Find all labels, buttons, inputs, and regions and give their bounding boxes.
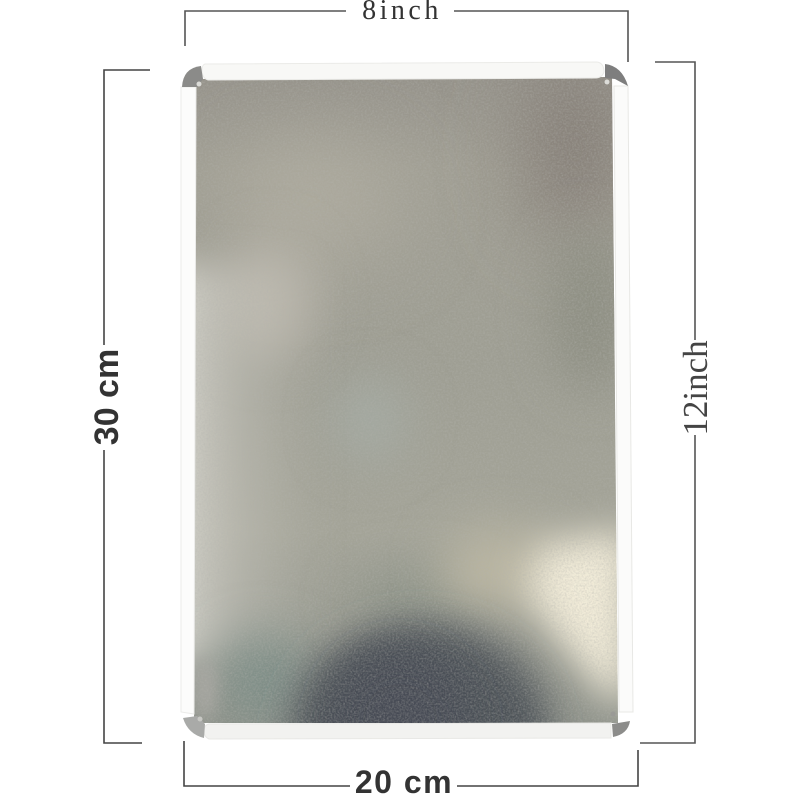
dimension: right 12 inch: 12inch	[676, 340, 715, 436]
corner: top left	[182, 66, 203, 87]
infographic: metal sign with dimensions	[94, 0, 708, 794]
frame: left white rail	[181, 87, 196, 714]
corner: bottom left	[183, 716, 205, 738]
panel: metal plate	[194, 77, 618, 723]
dimension: right 12 inch	[640, 62, 715, 743]
dimension: bottom 20 cm	[184, 741, 638, 800]
dimension: left 30 cm	[88, 70, 150, 743]
frame: right white rail	[614, 86, 633, 712]
frame: bottom white rail	[204, 723, 611, 739]
dimension: bottom 20 cm: 20 cm	[355, 764, 453, 800]
corner: bottom right	[610, 712, 630, 737]
corner: top right	[604, 64, 628, 86]
dimension: top 8 inch	[185, 0, 628, 62]
frame: top white rail	[202, 62, 604, 80]
dimension: left 30 cm: 30 cm	[88, 349, 126, 445]
